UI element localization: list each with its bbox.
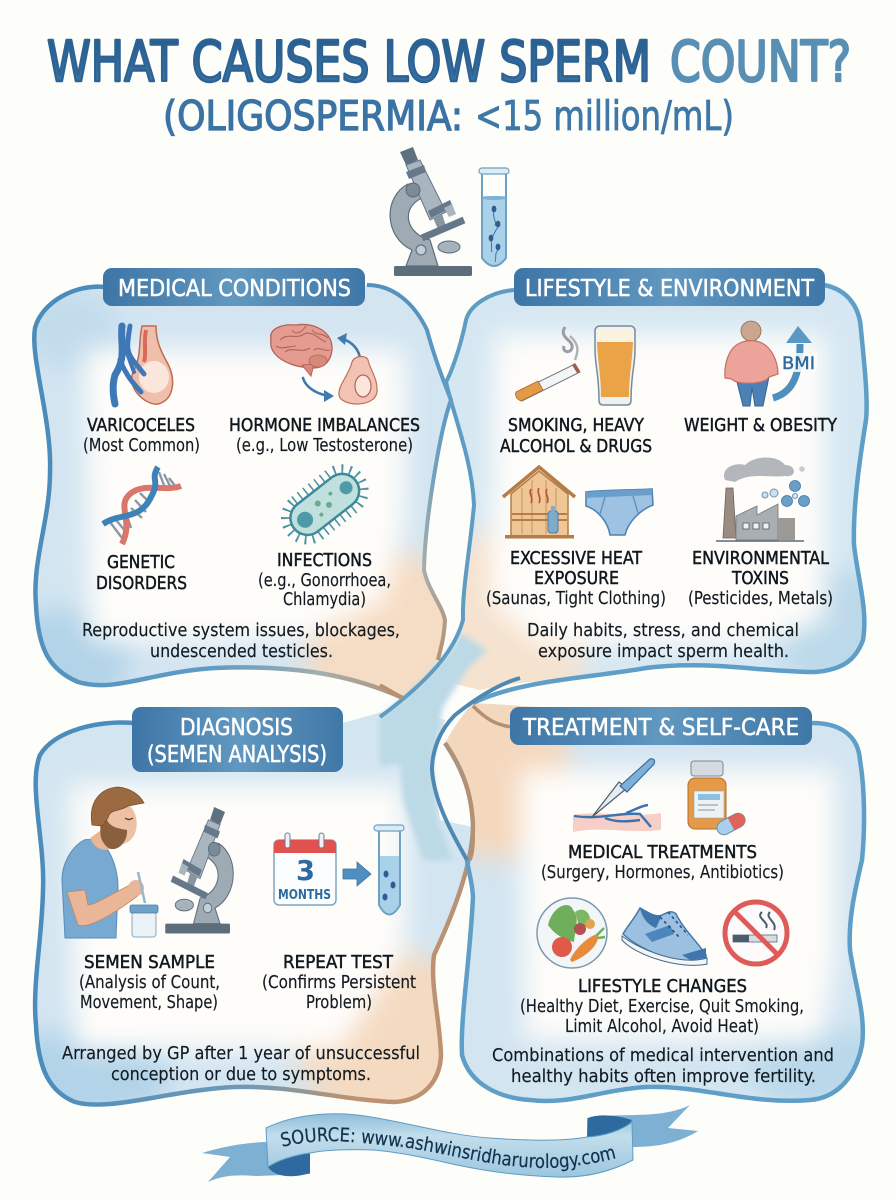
icon: header test tube: [479, 168, 509, 266]
label: repeat test: (Confirms Persistent: [262, 972, 416, 993]
icon: calendar three months: MONTHS: [278, 888, 331, 903]
icon: beer: [595, 326, 635, 405]
note: diagnosis: Arranged by GP after 1 year of unsuccessful: [62, 1043, 420, 1064]
icon: no smoking: [725, 902, 787, 964]
icon: calendar three months: [274, 833, 336, 905]
note: medical: Reproductive system issues, blockages,: [82, 620, 400, 641]
label: semen sample: SEMEN SAMPLE: [84, 952, 215, 973]
label: smoking and alcohol: [500, 415, 652, 457]
icon: varicoceles: [113, 326, 173, 404]
note: treatment: [492, 1045, 834, 1087]
label: smoking and alcohol: SMOKING, HEAVY: [508, 415, 644, 436]
label: weight and obesity: WEIGHT & OBESITY: [684, 415, 837, 436]
label: semen sample: Movement, Shape): [80, 992, 218, 1013]
panel: treatment and self-care: [380, 678, 864, 1101]
note: diagnosis: [62, 1043, 420, 1085]
label: repeat test: REPEAT TEST: [283, 952, 393, 973]
banner: diagnosis: (SEMEN ANALYSIS): [147, 742, 327, 768]
icon: dna: [103, 467, 181, 544]
note: diagnosis: conception or due to symptoms.: [111, 1064, 371, 1085]
label: infections: Chlamydia): [283, 589, 366, 610]
icon: calendar three months: 3: [296, 854, 315, 887]
title: WHAT CAUSES LOW SPERM: [47, 30, 651, 95]
banner: diagnosis: DIAGNOSIS: [180, 715, 293, 741]
icon: repeat test tube: [374, 825, 404, 914]
label: medical treatments: MEDICAL TREATMENTS: [568, 842, 757, 863]
label: genetic disorders: DISORDERS: [96, 573, 187, 594]
icon: medicine bottle and pill: [688, 761, 748, 837]
title: COUNT?: [670, 30, 851, 95]
icon: cigarette: [516, 327, 580, 401]
label: genetic disorders: GENETIC: [107, 552, 175, 573]
label: environmental toxins: TOXINS: [731, 568, 789, 589]
ribbon: source: SOURCE: www.ashwinsridharurology.com: [280, 1127, 616, 1172]
label: medical treatments: (Surgery, Hormones, Antibiotics): [541, 862, 784, 883]
icon: underwear: [586, 489, 653, 535]
subtitle: <15 million/mL): [475, 92, 734, 140]
label: lifestyle changes: [520, 976, 804, 1037]
icon: body weight and bmi: BMI: [782, 354, 815, 374]
panel: lifestyle and environment: [380, 268, 867, 717]
banner: diagnosis: [132, 707, 343, 772]
icon: healthy plate: [537, 898, 607, 968]
note: lifestyle: exposure impact sperm health.: [538, 641, 789, 662]
subtitle: [163, 92, 734, 140]
note: treatment: healthy habits often improve fertility.: [511, 1066, 816, 1087]
icon: factory: [716, 458, 810, 541]
banner: lifestyle: LIFESTYLE & ENVIRONMENT: [525, 276, 814, 302]
ribbon: source: [202, 1105, 698, 1182]
label: varicoceles: [83, 415, 200, 456]
label: semen sample: (Analysis of Count,: [79, 972, 220, 993]
icon: hormone imbalance: [271, 324, 377, 404]
label: infections: [258, 550, 391, 610]
banner: medical conditions: [103, 268, 365, 306]
label: varicoceles: (Most Common): [83, 435, 200, 456]
label: excessive heat: EXCESSIVE HEAT: [510, 548, 642, 569]
note: lifestyle: [527, 620, 799, 662]
label: lifestyle changes: Limit Alcohol, Avoid Heat): [565, 1016, 759, 1037]
label: hormone imbalances: HORMONE IMBALANCES: [229, 415, 420, 436]
subtitle: (OLIGOSPERMIA:: [163, 92, 463, 140]
banner: medical conditions: MEDICAL CONDITIONS: [118, 276, 351, 302]
panel: medical conditions: [34, 268, 451, 698]
label: repeat test: Problem): [306, 992, 372, 1013]
icon: header microscope: [390, 147, 472, 276]
icon: body weight and bmi: [725, 321, 817, 406]
icon: sauna: [503, 467, 575, 538]
label: repeat test: [262, 952, 416, 1013]
label: excessive heat: (Saunas, Tight Clothing): [486, 588, 666, 609]
note: treatment: Combinations of medical intervention and: [492, 1045, 834, 1066]
icon: running shoe: [622, 908, 707, 965]
label: excessive heat: EXPOSURE: [534, 568, 619, 589]
banner: lifestyle: [514, 268, 825, 306]
label: varicoceles: VARICOCELES: [87, 415, 195, 436]
note: medical: undescended testicles.: [150, 641, 333, 662]
label: lifestyle changes: (Healthy Diet, Exercise, Quit Smoking,: [520, 996, 804, 1017]
label: infections: INFECTIONS: [277, 550, 372, 571]
note: lifestyle: Daily habits, stress, and chemical: [527, 620, 799, 641]
label: excessive heat: [486, 548, 666, 609]
panel: diagnosis: [35, 707, 473, 1105]
label: infections: (e.g., Gonorrhoea,: [258, 570, 391, 591]
label: genetic disorders: [96, 552, 187, 594]
label: semen sample: [79, 952, 220, 1013]
banner: treatment: [510, 707, 812, 745]
arrow: to repeat test: [343, 862, 371, 886]
label: lifestyle changes: LIFESTYLE CHANGES: [578, 976, 747, 997]
note: medical: [82, 620, 400, 662]
icon: lab microscope: [165, 807, 233, 933]
label: medical treatments: [541, 842, 784, 883]
icon: scalpel and veins: [573, 759, 661, 832]
icon: bacterium: [281, 464, 369, 545]
label: smoking and alcohol: ALCOHOL & DRUGS: [500, 436, 652, 457]
panel backgrounds: watercolor washes: [0, 270, 896, 1130]
label: hormone imbalances: (e.g., Low Testosterone): [236, 435, 413, 456]
banner: treatment: TREATMENT & SELF-CARE: [522, 715, 799, 741]
label: environmental toxins: (Pesticides, Metals): [688, 588, 833, 609]
icon: man with sample: [62, 787, 158, 938]
label: environmental toxins: ENVIRONMENTAL: [692, 548, 829, 569]
label: environmental toxins: [688, 548, 833, 609]
label: hormone imbalances: [229, 415, 420, 456]
